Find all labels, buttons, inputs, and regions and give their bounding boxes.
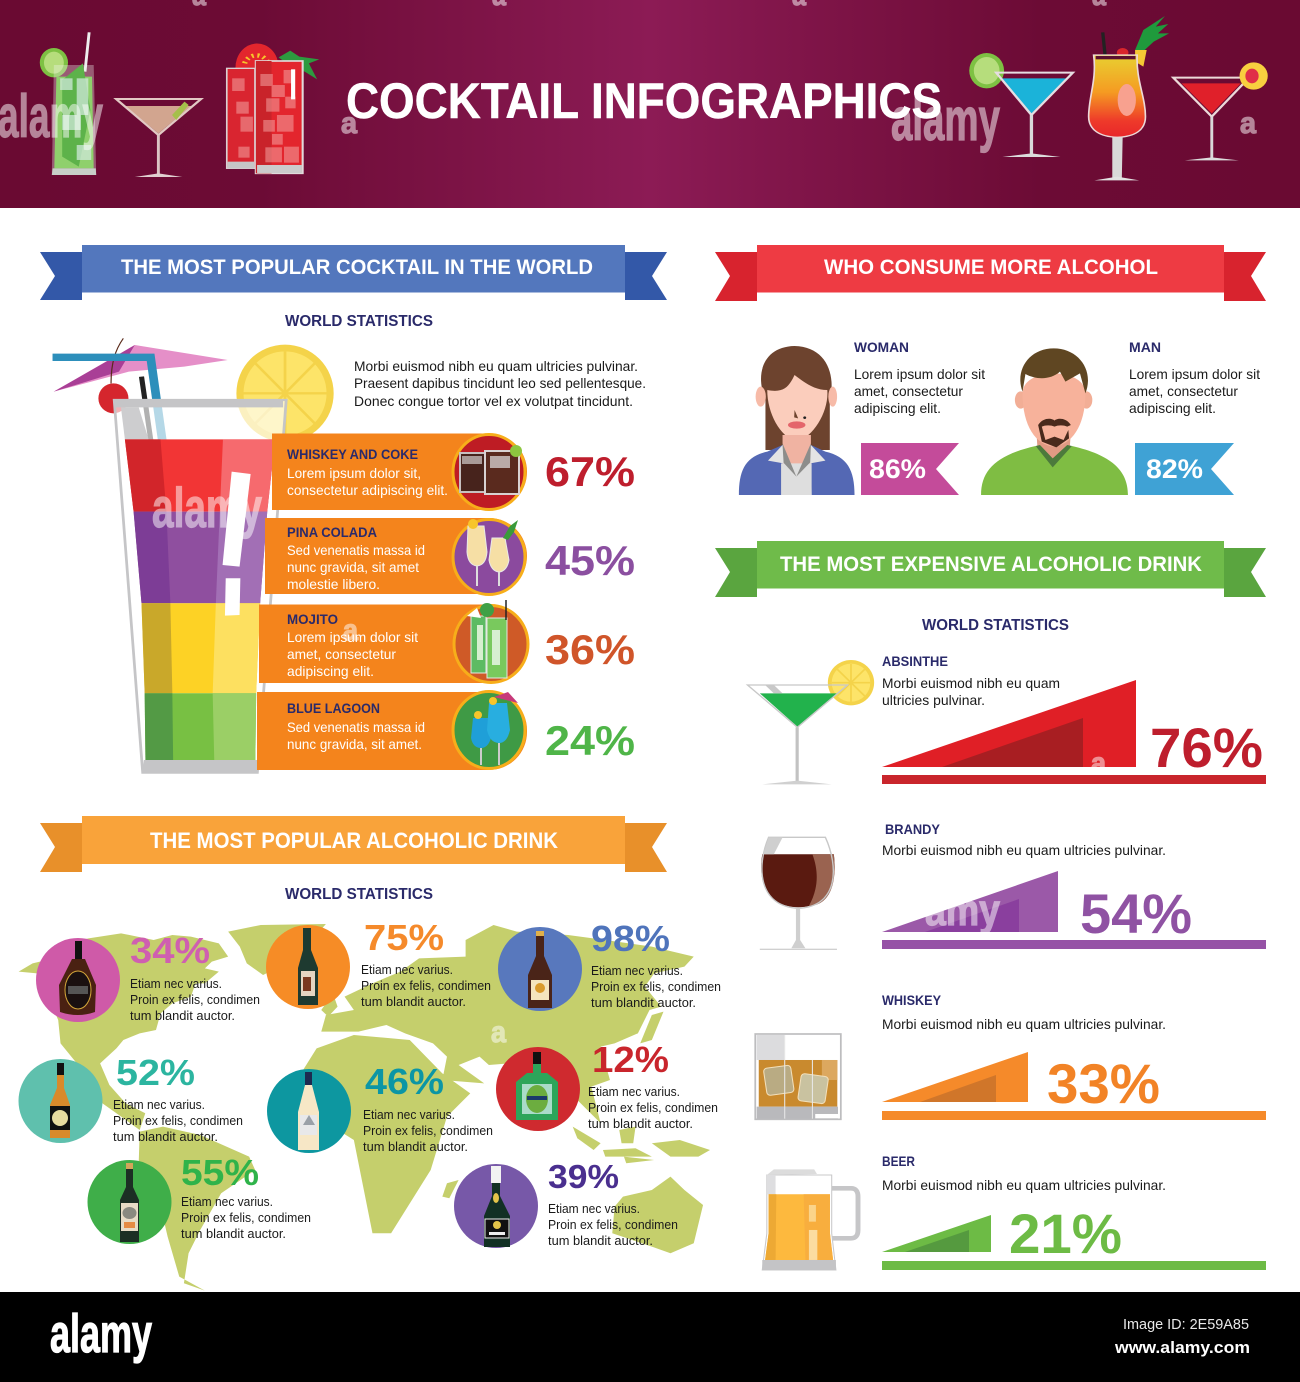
icon: hurricane cocktail — [1089, 16, 1169, 180]
item: beer: BEER — [882, 1153, 915, 1169]
watermarks: alamy — [152, 476, 262, 539]
icon: beer mug — [762, 1169, 858, 1270]
watermarks: a — [341, 107, 357, 140]
heading: world statistics 2: WORLD STATISTICS — [922, 617, 1069, 634]
watermarks: a — [343, 614, 358, 647]
row: pina colada — [265, 518, 527, 594]
item: 75% bottle: tum blandit auctor. — [361, 994, 466, 1009]
item: 34% bottle: tum blandit auctor. — [130, 1008, 235, 1023]
item: 98% bottle: tum blandit auctor. — [591, 995, 696, 1010]
item: 52% bottle — [18, 1052, 243, 1144]
stat: 67%: 67% — [545, 448, 635, 495]
woman text: adipiscing elit. — [854, 400, 941, 416]
row: blue lagoon: BLUE LAGOON — [287, 700, 380, 716]
item: absinthe: 76% — [1150, 716, 1263, 779]
banner: who consume more alcohol: WHO CONSUME MORE ALCOHOL — [824, 256, 1158, 279]
intro paragraph: Morbi euismod nibh eu quam ultricies pulvinar. — [354, 358, 638, 374]
woman text: amet, consectetur — [854, 383, 963, 399]
item: 12% bottle: 12% — [592, 1039, 669, 1080]
item: 12% bottle: Etiam nec varius. — [588, 1084, 680, 1099]
man text — [1129, 339, 1260, 416]
item: 55% bottle: tum blandit auctor. — [181, 1226, 286, 1241]
item: 46% bottle: Etiam nec varius. — [363, 1107, 455, 1122]
item: 39% bottle: Proin ex felis, condimen — [548, 1217, 678, 1232]
row: pina colada: molestie libero. — [287, 576, 380, 592]
icon: whiskey tumbler — [755, 1034, 841, 1119]
badge: 82% — [1135, 443, 1234, 495]
item: 55% bottle — [88, 1152, 311, 1244]
watermarks — [0, 0, 1256, 1049]
row: mojito: MOJITO — [287, 611, 338, 627]
item: 75% bottle: Etiam nec varius. — [361, 962, 453, 977]
icon: pina colada glasses — [453, 519, 525, 594]
row: blue lagoon: nunc gravida, sit amet. — [287, 736, 422, 752]
glass base — [143, 760, 257, 773]
row: whiskey and coke: Lorem ipsum dolor sit, — [287, 465, 421, 481]
watermarks: amy — [925, 886, 1000, 935]
row: pina colada: Sed venenatis massa id — [287, 542, 425, 558]
item: absinthe: ultricies pulvinar. — [882, 692, 985, 708]
item: 52% bottle: 52% — [116, 1052, 195, 1093]
header band — [0, 0, 1300, 208]
row: pina colada: PINA COLADA — [287, 524, 377, 540]
big layered cocktail glass — [53, 338, 334, 773]
woman text: Lorem ipsum dolor sit — [854, 366, 985, 382]
item: 98% bottle: Etiam nec varius. — [591, 963, 683, 978]
intro paragraph: Donec congue tortor vel ex volutpat tincidunt. — [354, 393, 633, 409]
row: mojito: amet, consectetur — [287, 646, 396, 662]
footer bar: Image ID: 2E59A85 — [1123, 1316, 1249, 1333]
badge: 86%: 86% — [869, 454, 926, 484]
glass shell — [114, 400, 286, 773]
banner: most popular cocktail — [40, 245, 667, 300]
item: brandy: BRANDY — [885, 821, 941, 837]
heading: world statistics 1: WORLD STATISTICS — [285, 313, 433, 330]
item: 75% bottle: 75% — [364, 917, 444, 958]
intro paragraph — [354, 358, 646, 409]
footer bar — [0, 1292, 1300, 1382]
cherry — [111, 338, 123, 383]
item: 46% bottle — [267, 1061, 493, 1154]
icon: blue martini with lime — [969, 53, 1073, 157]
banner: most expensive alcoholic drink: THE MOST EXPENSIVE ALCOHOLIC DRINK — [780, 553, 1202, 576]
item: 46% bottle: 46% — [365, 1061, 444, 1102]
item: 52% bottle: tum blandit auctor. — [113, 1129, 218, 1144]
banner: most expensive alcoholic drink — [715, 541, 1266, 597]
layer red — [125, 439, 275, 512]
item: brandy: Morbi euismod nibh eu quam ultricies pulvinar. — [882, 842, 1166, 858]
row: blue lagoon — [257, 692, 527, 770]
item: whiskey: 33% — [1047, 1052, 1160, 1115]
banner: most popular alcoholic drink: THE MOST POPULAR ALCOHOLIC DRINK — [150, 828, 558, 853]
item: 55% bottle: Etiam nec varius. — [181, 1194, 273, 1209]
item: 52% bottle: Proin ex felis, condimen — [113, 1113, 243, 1128]
item: 12% bottle: Proin ex felis, condimen — [588, 1100, 718, 1115]
watermarks: a — [491, 1016, 506, 1049]
woman text — [854, 339, 985, 416]
world map — [19, 924, 710, 1291]
item: beer — [882, 1153, 1266, 1270]
icon: red martini with citrus — [1173, 62, 1268, 160]
umbrella — [54, 345, 228, 392]
layer purple — [134, 512, 267, 603]
badge: 82%: 82% — [1146, 454, 1203, 484]
layer green — [145, 693, 256, 760]
icon: whiskey and coke glasses — [453, 434, 525, 510]
icon: blue lagoon glasses — [453, 692, 525, 768]
item: 46% bottle: tum blandit auctor. — [363, 1139, 468, 1154]
watermarks: alamy — [891, 86, 1000, 153]
icon: brandy glass — [760, 837, 837, 949]
item: 12% bottle: tum blandit auctor. — [588, 1116, 693, 1131]
row: whiskey and coke: WHISKEY AND COKE — [287, 446, 418, 462]
item: 55% bottle: Proin ex felis, condimen — [181, 1210, 311, 1225]
icon: absinthe glass — [748, 660, 874, 784]
person: woman — [739, 346, 855, 495]
row: whiskey and coke — [272, 434, 527, 510]
item: absinthe: Morbi euismod nibh eu quam — [882, 675, 1060, 691]
item: 98% bottle: Proin ex felis, condimen — [591, 979, 721, 994]
person: man — [981, 348, 1128, 495]
row: pina colada: nunc gravida, sit amet — [287, 559, 419, 575]
item: 34% bottle: Etiam nec varius. — [130, 976, 222, 991]
item: absinthe — [882, 653, 1266, 784]
intro paragraph: Praesent dapibus tincidunt leo sed pellentesque. — [354, 375, 646, 391]
footer bar: www.alamy.com — [1114, 1338, 1250, 1357]
watermarks: alamy — [0, 83, 103, 150]
item: 46% bottle: Proin ex felis, condimen — [363, 1123, 493, 1138]
item: 34% bottle: 34% — [130, 930, 210, 971]
banner: who consume more alcohol — [715, 245, 1266, 301]
item: whiskey — [882, 992, 1266, 1120]
item: 55% bottle: 55% — [181, 1152, 259, 1193]
man text: amet, consectetur — [1129, 383, 1238, 399]
stat: 45%: 45% — [545, 537, 635, 584]
row: mojito: adipiscing elit. — [287, 663, 374, 679]
man text: adipiscing elit. — [1129, 400, 1216, 416]
item: brandy: 54% — [1080, 882, 1192, 945]
item: 39% bottle: tum blandit auctor. — [548, 1233, 653, 1248]
item: whiskey: Morbi euismod nibh eu quam ultricies pulvinar. — [882, 1016, 1166, 1032]
item: 34% bottle: Proin ex felis, condimen — [130, 992, 260, 1007]
banner: most popular alcoholic drink — [40, 816, 667, 872]
item: 39% bottle — [454, 1158, 678, 1248]
banner: most popular cocktail: THE MOST POPULAR COCKTAIL IN THE WORLD — [121, 256, 593, 279]
item: 52% bottle: Etiam nec varius. — [113, 1097, 205, 1112]
watermarks: a — [1240, 107, 1256, 140]
lemon slice — [236, 345, 334, 442]
item: 39% bottle: 39% — [548, 1158, 619, 1195]
footer bar: alamy — [50, 1304, 152, 1364]
man text: Lorem ipsum dolor sit — [1129, 366, 1260, 382]
row: mojito: Lorem ipsum dolor sit — [287, 629, 418, 645]
icon: pale martini — [116, 99, 201, 177]
item: 98% bottle — [498, 918, 721, 1011]
item: 12% bottle — [496, 1039, 718, 1131]
item: beer: 21% — [1009, 1202, 1122, 1265]
icon: mojito glasses — [454, 600, 528, 682]
highlight — [223, 472, 251, 567]
watermarks: a — [1091, 747, 1106, 780]
layer yellow — [142, 603, 260, 693]
item: 75% bottle — [266, 917, 491, 1009]
icon: red glasses with tomato slice — [227, 43, 319, 173]
straws — [53, 357, 162, 442]
item: 98% bottle: 98% — [591, 918, 670, 959]
badge: 86% — [861, 443, 959, 495]
row: mojito — [259, 600, 529, 683]
title: COCKTAIL INFOGRAPHICS — [346, 73, 942, 129]
stat: 36%: 36% — [545, 626, 635, 673]
stat: 24%: 24% — [545, 717, 635, 764]
item: 39% bottle: Etiam nec varius. — [548, 1201, 640, 1216]
item: absinthe: ABSINTHE — [882, 653, 948, 669]
item: brandy — [882, 821, 1266, 949]
heading: world statistics 3: WORLD STATISTICS — [285, 886, 433, 903]
row: whiskey and coke: consectetur adipiscing elit. — [287, 482, 448, 498]
man text: MAN — [1129, 339, 1161, 355]
row: blue lagoon: Sed venenatis massa id — [287, 719, 425, 735]
icon: mojito glass — [40, 32, 96, 175]
item: 75% bottle: Proin ex felis, condimen — [361, 978, 491, 993]
item: beer: Morbi euismod nibh eu quam ultricies pulvinar. — [882, 1177, 1166, 1193]
item: whiskey: WHISKEY — [882, 992, 942, 1008]
woman text: WOMAN — [854, 339, 909, 355]
item: 34% bottle — [36, 930, 260, 1023]
